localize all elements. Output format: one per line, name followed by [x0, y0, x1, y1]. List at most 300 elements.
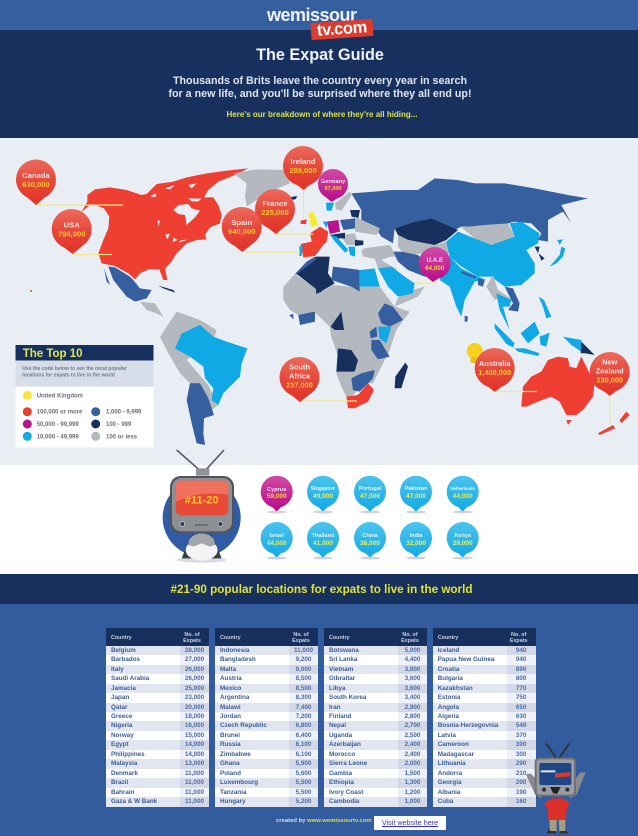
credit line: created by www.wemissourtv.com — [276, 818, 372, 824]
bubble: Netherlands — [447, 476, 479, 514]
table 2: 6,800 — [296, 722, 311, 729]
table 2: Ghana — [220, 760, 240, 767]
table 3: Sri Lanka — [329, 656, 357, 663]
Austria and Hungary — [330, 233, 345, 238]
table 3: 4,400 — [405, 656, 420, 663]
legend panel: The Top 10: 1,000 - 9,999 — [106, 410, 142, 416]
table 3: 3,600 — [405, 675, 420, 682]
table 4: 750 — [516, 694, 526, 701]
table 3: Gambia — [329, 770, 352, 777]
bubble: Israel: 44,000 — [267, 540, 287, 547]
table 1: 27,000 — [185, 656, 204, 663]
icon: light bulb — [467, 343, 483, 363]
section heading band — [0, 574, 638, 604]
logo: wemissour — [267, 5, 357, 25]
bubble: Netherlands: Netherlands — [451, 486, 475, 491]
table 1: 14,000 — [185, 751, 204, 758]
table 4: Andorra — [438, 770, 462, 777]
table 2: Mexico — [220, 685, 241, 692]
table 3: Ivory Coast — [329, 789, 363, 796]
table 2: 9,000 — [296, 666, 311, 673]
table 1: Qatar — [111, 704, 127, 710]
bubble: Thailand — [307, 522, 339, 560]
Korea — [535, 247, 545, 261]
table 1 — [106, 628, 209, 807]
table 4: 770 — [516, 685, 526, 692]
table 1: 11,000 — [185, 770, 204, 777]
table 4: Albania — [438, 789, 460, 796]
pin: Australia: 1,400,000 — [478, 368, 511, 377]
table 2: Czech Republic — [220, 722, 267, 729]
Spain — [301, 242, 323, 257]
pin: USA: 794,000 — [58, 230, 85, 238]
Libya — [331, 267, 360, 292]
pin: Australia: Australia — [479, 359, 511, 368]
table 4: 540 — [516, 722, 526, 729]
legend panel: The Top 10: Use the code below to see the most popular — [22, 366, 127, 372]
table 3: 2,000 — [405, 760, 420, 767]
table 4: 800 — [516, 675, 526, 682]
bubble: Israel: Israel — [270, 533, 284, 539]
pin: South Africa — [280, 357, 320, 402]
legend panel: The Top 10: 10,000 - 49,999 — [37, 434, 79, 440]
bubble: Singapore — [307, 476, 339, 514]
legend panel: The Top 10: The Top 10 — [23, 348, 83, 360]
table 4: Iceland — [438, 647, 459, 654]
pin: South Africa: Africa — [289, 372, 311, 380]
table 4: Croatia — [438, 666, 459, 673]
Australia — [521, 357, 595, 415]
table 1: Nigeria — [111, 722, 132, 729]
table 3 — [324, 628, 427, 807]
table 3: 2,700 — [405, 722, 420, 729]
Germany — [327, 220, 340, 234]
map: Europe — [299, 192, 395, 258]
table 1: 23,000 — [185, 694, 204, 701]
table 2: No. of — [293, 632, 309, 638]
table 4: Bulgaria — [438, 675, 463, 682]
table 3: 2,400 — [405, 741, 420, 748]
table 3: 2,800 — [405, 713, 420, 720]
South Africa — [346, 383, 374, 408]
bubble: Kenya: Kenya — [454, 533, 472, 539]
pin: Germany — [318, 169, 348, 202]
United Kingdom — [308, 212, 318, 227]
table 2: Hungary — [220, 798, 246, 805]
pin: Germany: 97,000 — [324, 186, 342, 192]
table 3: Morocco — [329, 751, 355, 758]
mascot: TV with red shirt — [526, 742, 586, 834]
table 3: 2,500 — [405, 732, 420, 739]
table 4: 190 — [516, 789, 526, 796]
table 2: Russia — [220, 741, 241, 748]
table 2 — [215, 628, 318, 807]
table 3: 3,800 — [405, 666, 420, 673]
table 2: Country — [220, 635, 241, 641]
Mongolia — [461, 223, 515, 245]
India and Pakistan — [440, 257, 486, 317]
table 2: 5,500 — [296, 779, 311, 786]
table 4: Angola — [438, 704, 459, 710]
table 4: Expats — [510, 638, 528, 644]
Kenya — [378, 327, 391, 343]
Kazakhstan — [395, 218, 458, 245]
pin: New Zealand — [590, 352, 630, 396]
Cuba — [158, 286, 175, 293]
table 4: 300 — [516, 741, 526, 748]
table 2: Austria — [220, 675, 242, 682]
header panel — [0, 30, 638, 138]
table 1: Greece — [111, 713, 132, 720]
table 3: Iran — [329, 704, 341, 710]
table 3: 1,000 — [405, 798, 420, 805]
Africa — [316, 285, 410, 400]
table 1: 15,000 — [185, 732, 204, 739]
table 3: No. of — [402, 632, 418, 638]
bubble: Netherlands: 44,000 — [453, 493, 473, 500]
table 4: Cuba — [438, 798, 453, 805]
callout lines — [36, 190, 610, 427]
table 4: 630 — [516, 713, 526, 720]
table 1: 14,000 — [185, 741, 204, 748]
bubble: China: China — [362, 533, 379, 539]
pin: South Africa: 237,000 — [286, 380, 313, 390]
table 1: 16,000 — [185, 722, 204, 729]
Norway and Denmark — [326, 203, 334, 211]
Brazil — [175, 325, 247, 405]
bubble: Cyprus: 59,000 — [267, 493, 287, 500]
table 4: Papua New Guinea — [438, 656, 494, 663]
bubble: Cyprus: Cyprus — [267, 487, 286, 493]
table 1: Malaysia — [111, 760, 137, 767]
logo — [267, 5, 374, 40]
table 1: 11,000 — [185, 798, 204, 805]
table 2: Jordan — [220, 713, 241, 720]
Turkey — [363, 245, 395, 258]
Saudi Arabia — [378, 267, 415, 297]
bubble: Portugal — [354, 476, 386, 514]
pin: U.A.E — [419, 247, 451, 282]
bubble: Cyprus — [261, 476, 293, 514]
Italy — [330, 235, 348, 253]
table 1: 18,000 — [185, 713, 204, 720]
table 2: 8,500 — [296, 685, 311, 692]
table 2: Malta — [220, 666, 236, 673]
legend panel: The Top 10 — [16, 345, 154, 448]
table 3: Botswana — [329, 647, 359, 654]
table 4: 940 — [516, 647, 526, 654]
table 4: No. of — [511, 632, 526, 638]
Baltics — [350, 210, 360, 218]
table 3: Nepal — [329, 722, 346, 729]
pin: France — [255, 189, 295, 234]
pin: U.A.E: 64,000 — [425, 265, 445, 272]
table 4: Kazakhstan — [438, 685, 473, 692]
section heading: #21-90 popular locations for expats to live in the world — [170, 583, 472, 596]
pin: France: 225,000 — [261, 208, 289, 217]
bubble: India — [400, 522, 432, 560]
website link box: Visit website here — [382, 818, 438, 827]
white section — [0, 465, 638, 574]
table 2: Argentina — [220, 694, 249, 701]
table 4: 890 — [516, 666, 526, 673]
logo: tv.com — [316, 18, 368, 40]
table 2: Poland — [220, 770, 241, 777]
table 3: Gibraltar — [329, 675, 355, 682]
central Asia — [398, 235, 450, 255]
bubble: Pakistan — [400, 476, 432, 514]
legend panel: The Top 10: 100,000 or more — [37, 410, 83, 416]
Nepal and Bangladesh — [461, 271, 485, 287]
table 2: 6,100 — [296, 741, 311, 748]
table 2: 8,300 — [296, 694, 311, 701]
map: Eurasia, Africa and Oceania — [316, 178, 630, 435]
table 3: Ethiopia — [329, 779, 354, 786]
Papua New Guinea — [581, 342, 595, 355]
table 3: Country — [329, 635, 350, 641]
Central America — [140, 302, 163, 317]
pin: U.A.E: U.A.E — [426, 257, 443, 264]
Indonesia — [495, 322, 581, 356]
table 3: Sierra Leone — [329, 760, 367, 767]
France — [310, 227, 328, 245]
TV mascot: #11-20: #11-20 — [185, 494, 218, 506]
pin: USA — [52, 209, 92, 254]
yellow subheading: Here's our breakdown of where they're all hiding... — [227, 110, 417, 119]
table 4: 650 — [516, 704, 526, 710]
Ukraine and eastern Europe — [340, 217, 380, 245]
intro text: Thousands of Brits leave the country every year in search — [173, 74, 467, 86]
table 2: 5,900 — [296, 760, 311, 767]
South America — [160, 312, 218, 410]
Ireland — [301, 219, 307, 224]
table 1: Barbados — [111, 656, 140, 663]
China — [446, 222, 540, 287]
table 2: Malawi — [220, 704, 241, 710]
table 1: 26,000 — [185, 666, 204, 673]
table 4: Bosnia-Herzegovnia — [438, 722, 498, 729]
table 4: Country — [438, 635, 458, 641]
top bar — [0, 0, 638, 30]
Poland — [340, 218, 355, 230]
table 2: 11,000 — [294, 647, 313, 654]
pin: Canada: Canada — [22, 171, 50, 180]
pin: France: France — [263, 199, 287, 208]
Iran — [393, 252, 438, 277]
legend panel: The Top 10: 50,000 - 99,999 — [37, 422, 79, 428]
Thailand — [496, 293, 511, 330]
table 4: Cameroon — [438, 741, 469, 748]
pin: Spain — [222, 207, 262, 252]
table 2: Brunei — [220, 732, 240, 739]
Egypt — [360, 268, 380, 287]
table 4: Latvia — [438, 732, 456, 739]
table 4: 160 — [516, 798, 526, 805]
table 3: 5,000 — [405, 647, 420, 654]
west Africa — [283, 274, 320, 315]
legend panel: The Top 10: 100 or less — [106, 434, 138, 440]
table 2: 8,500 — [296, 675, 311, 682]
intro text: for a new life, and you'll be surprised where they all end up! — [168, 88, 472, 100]
table 3: Vietnam — [329, 666, 353, 673]
Japan — [550, 239, 565, 267]
Ghana, Ivory Coast, Sierra Leone — [289, 312, 315, 325]
Argentina — [187, 383, 214, 445]
bubble: Kenya: 29,000 — [453, 540, 473, 547]
table 1: Denmark — [111, 770, 138, 777]
bubble: Israel — [261, 522, 293, 560]
bubble: India: 32,000 — [406, 540, 426, 547]
table 1: Philippines — [111, 751, 145, 758]
pin: New Zealand: New — [602, 358, 618, 366]
Portugal — [299, 246, 303, 256]
table 1: 28,000 — [185, 647, 204, 654]
table 2: 7,200 — [296, 713, 311, 720]
Tasmania — [566, 420, 572, 425]
table 3: Uganda — [329, 732, 352, 739]
Sweden — [335, 192, 352, 211]
tables background — [0, 604, 638, 836]
bubble: Kenya — [447, 522, 479, 560]
Botswana and Zimbabwe — [351, 370, 375, 392]
bubble: Singapore: 49,000 — [313, 493, 333, 500]
Turkey and Arabia — [361, 247, 425, 307]
pin: Ireland — [283, 146, 323, 190]
table 3: 1,500 — [405, 770, 420, 777]
table 3: 2,900 — [405, 704, 420, 710]
table 1: Jamacia — [111, 685, 136, 692]
Mexico — [104, 267, 152, 302]
table 1: 20,000 — [185, 704, 204, 710]
table 4: 300 — [516, 751, 526, 758]
table 1: Norway — [111, 732, 134, 739]
New Zealand — [598, 412, 630, 435]
Hawaii — [30, 290, 32, 292]
Iceland — [291, 196, 297, 200]
title: The Expat Guide — [256, 46, 384, 64]
legend panel: The Top 10: locations for expats to live in the world — [22, 373, 115, 379]
table 3: 2,400 — [405, 751, 420, 758]
pin: Australia — [475, 348, 515, 392]
Philippines — [539, 297, 551, 318]
table 3: 1,300 — [405, 779, 420, 786]
map background — [0, 138, 638, 465]
Cameroon — [331, 312, 344, 330]
pin: New Zealand: Zealand — [596, 366, 624, 376]
table 1: 26,000 — [185, 675, 204, 682]
table 1: Belgium — [111, 647, 136, 654]
map: the Americas and west Africa — [30, 168, 322, 445]
table 4: Lithuania — [438, 760, 466, 767]
table 2: 5,500 — [296, 789, 311, 796]
legend panel: The Top 10: United Kingdom — [37, 394, 83, 400]
table 3: Finland — [329, 713, 351, 720]
table 1: Saudi Arabia — [111, 675, 149, 682]
table 1: 11,000 — [185, 789, 204, 796]
table 2: Bangladesh — [220, 656, 256, 663]
table 4: 200 — [516, 779, 526, 786]
table 2: 5,200 — [296, 798, 311, 805]
table 2: 7,400 — [296, 704, 311, 710]
table 2: 6,100 — [296, 751, 311, 758]
table 3: Azerbaijan — [329, 741, 361, 748]
table 2: 9,200 — [296, 656, 311, 663]
website link box — [374, 816, 446, 830]
Bulgaria — [355, 240, 363, 246]
bubble: Portugal: 47,000 — [360, 493, 380, 500]
table 1: Gaza & W Bank — [111, 798, 157, 805]
Russia — [351, 178, 588, 243]
table 1: 13,000 — [185, 760, 204, 767]
bubble: Portugal: Portugal — [359, 486, 382, 492]
table 2: Indonesia — [220, 647, 249, 654]
pin: New Zealand: 230,000 — [596, 376, 623, 384]
table 4: Estonia — [438, 694, 460, 701]
bubble: Pakistan: Pakistan — [405, 486, 428, 492]
pin: Ireland: 289,000 — [289, 166, 317, 175]
Angola — [336, 348, 358, 372]
Sri Lanka — [465, 316, 468, 322]
table 1: Egypt — [111, 741, 128, 748]
pin: Germany: Germany — [321, 179, 346, 185]
table 4 — [433, 628, 536, 807]
Tanzania — [370, 327, 390, 359]
table 2: 6,400 — [296, 732, 311, 739]
pin: Ireland: Ireland — [291, 157, 316, 166]
table 2: Zimbabwe — [220, 751, 251, 758]
table 1: 11,000 — [185, 779, 204, 786]
table 3: Expats — [401, 638, 419, 644]
table 4: 370 — [516, 732, 526, 739]
Netherlands — [323, 222, 327, 228]
pin: USA: USA — [64, 220, 80, 230]
pin: Spain: 940,000 — [228, 227, 255, 236]
table 4: 210 — [516, 770, 526, 777]
Vietnam and Cambodia — [505, 287, 520, 312]
table 1: Italy — [111, 666, 124, 673]
bubble: Thailand: 41,000 — [313, 540, 333, 547]
table 3: 3,400 — [405, 694, 420, 701]
pin: South Africa: South — [289, 362, 310, 372]
table 3: 1,200 — [405, 789, 420, 796]
table 1: Japan — [111, 694, 129, 701]
Greenland — [233, 169, 290, 207]
bubble: Singapore: Singapore — [311, 486, 335, 492]
table 4: Georgia — [438, 779, 461, 786]
table 1: Brazil — [111, 779, 128, 786]
TV mascot: #11-20 — [163, 450, 241, 563]
table 1: Expats — [183, 638, 201, 644]
Greece — [348, 247, 355, 257]
bubble: Thailand: Thailand — [312, 533, 334, 539]
table 4: Madagascar — [438, 751, 474, 758]
legend panel: The Top 10: 100 - 999 — [106, 422, 132, 428]
table 1: Bahrain — [111, 789, 134, 796]
table 2: 5,600 — [296, 770, 311, 777]
table 2: Expats — [292, 638, 310, 644]
table 1: No. of — [184, 632, 200, 638]
table 4: Algeria — [438, 713, 459, 720]
Morocco — [295, 257, 320, 275]
table 3: Libya — [329, 685, 345, 692]
bubble: Pakistan: 47,000 — [406, 493, 426, 500]
table 2: Tanzania — [220, 789, 246, 796]
South East Asia mainland — [486, 275, 518, 303]
table 4: 290 — [516, 760, 526, 767]
Ethiopia — [378, 303, 403, 327]
pin: Canada — [16, 160, 56, 205]
table 3: South Korea — [329, 694, 366, 701]
